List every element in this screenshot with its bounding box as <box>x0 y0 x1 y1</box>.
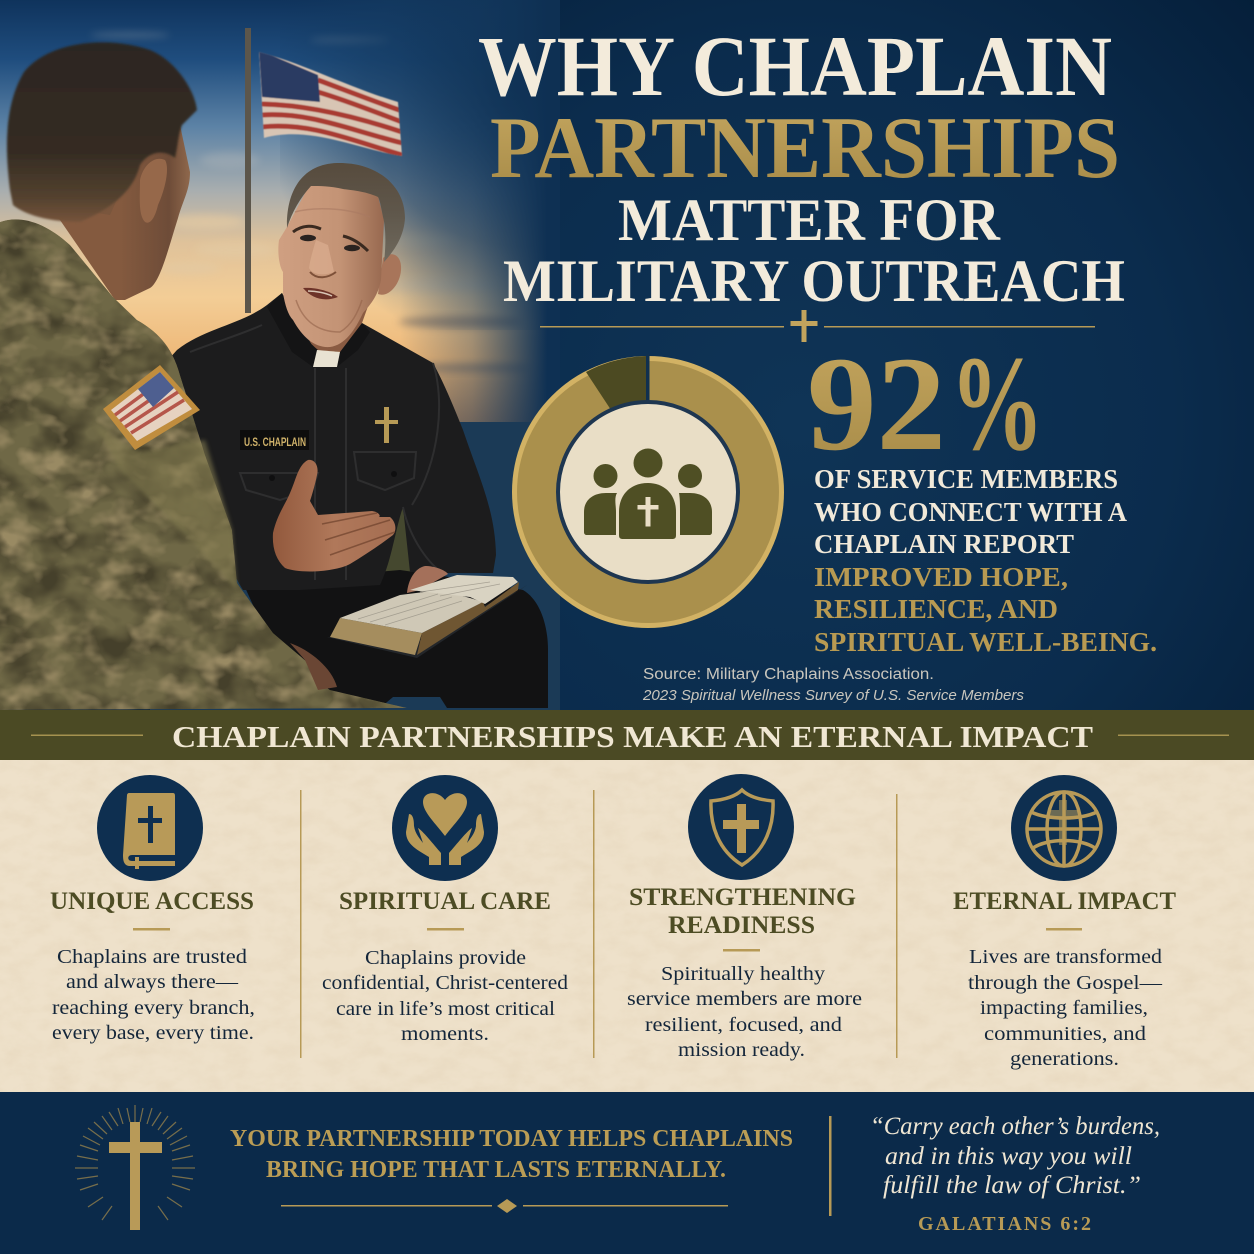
chaplain shirt <box>150 293 496 590</box>
shoulder flag patch <box>103 365 200 450</box>
call to action: YOUR PARTNERSHIP TODAY HELPS CHAPLAINS <box>230 1126 793 1152</box>
hair <box>287 163 405 262</box>
body text: reaching every branch, <box>52 997 255 1019</box>
accent bar <box>723 949 760 952</box>
call to action: BRING HOPE THAT LASTS ETERNALLY. <box>266 1157 726 1183</box>
icon: radiant cross <box>75 1105 195 1230</box>
Bible quote <box>870 1113 1160 1199</box>
statistic description: RESILIENCE, AND <box>814 594 1058 624</box>
body text <box>52 946 255 1044</box>
statistic description: IMPROVED HOPE, <box>814 562 1068 592</box>
body text <box>627 963 862 1061</box>
body text: through the Gospel— <box>968 972 1163 994</box>
body text: and always there— <box>66 971 239 993</box>
heading: UNIQUE ACCESS <box>50 888 254 915</box>
body text: care in life’s most critical <box>336 998 555 1020</box>
title: MATTER FOR <box>618 187 1001 253</box>
title divider with cross <box>540 310 1095 342</box>
body text: Spiritually healthy <box>661 963 825 985</box>
statistic description: SPIRITUAL WELL-BEING. <box>814 627 1157 657</box>
footer vertical divider <box>829 1116 832 1216</box>
heading: ETERNAL IMPACT <box>953 888 1176 915</box>
heading band <box>0 710 1254 760</box>
soldier neck and face <box>60 126 190 300</box>
source note <box>642 666 1024 704</box>
body text: generations. <box>1010 1048 1119 1070</box>
accent bar <box>427 928 464 930</box>
accent bar <box>133 928 170 930</box>
source note: Source: Military Chaplains Association. <box>643 666 934 683</box>
icon: globe with cross <box>1011 775 1117 881</box>
statistic description: OF SERVICE MEMBERS <box>814 464 1118 494</box>
statistic description: CHAPLAIN REPORT <box>814 529 1074 559</box>
statistic description: WHO CONNECT WITH A <box>814 497 1127 527</box>
soldier ear <box>140 159 167 223</box>
big statistic: 92%: % <box>950 329 1044 479</box>
heading: STRENGTHENING <box>629 884 856 911</box>
body text: Chaplains provide <box>365 947 526 969</box>
neck <box>283 295 372 352</box>
name tape: U.S. CHAPLAIN <box>244 435 306 449</box>
source note: 2023 Spiritual Wellness Survey of U.S. Service Members <box>642 687 1024 704</box>
collar band <box>280 293 362 366</box>
title: WHY CHAPLAIN <box>478 18 1112 114</box>
clerical collar tab <box>313 350 340 367</box>
background: navy hero panel <box>0 0 1254 710</box>
panel: eternal impact <box>953 775 1176 1070</box>
heading: SPIRITUAL CARE <box>339 888 551 915</box>
body text: service members are more <box>627 988 862 1010</box>
body text: Lives are transformed <box>969 946 1162 968</box>
photo sky <box>0 0 560 425</box>
body text: communities, and <box>984 1023 1146 1045</box>
title <box>478 18 1125 314</box>
panel: strengthening readiness <box>627 774 862 1061</box>
eyes, brows, mouth <box>293 226 368 299</box>
donut chart: 92 percent <box>512 354 784 628</box>
chest cross pin <box>375 407 398 443</box>
accent bar <box>1046 928 1082 930</box>
body text: moments. <box>401 1023 489 1045</box>
footer band <box>0 1092 1254 1254</box>
face <box>278 180 384 347</box>
statistic description <box>814 464 1157 657</box>
open Bible <box>327 575 527 658</box>
body text: Chaplains are trusted <box>57 946 247 968</box>
quote citation: GALATIANS 6:2 <box>918 1213 1091 1235</box>
Bible quote: “Carry each other’s burdens, <box>870 1113 1160 1140</box>
heading <box>629 884 856 939</box>
column dividers <box>300 790 898 1058</box>
American flag <box>258 52 403 156</box>
chaplain <box>150 163 548 708</box>
body text <box>322 947 568 1045</box>
Bible quote: and in this way you will <box>885 1143 1132 1170</box>
icon: shield with cross <box>688 774 794 880</box>
body text: every base, every time. <box>52 1022 254 1044</box>
chaplain lower hand <box>407 566 448 593</box>
soldier hair <box>7 42 197 222</box>
divider with diamond <box>281 1199 728 1213</box>
icon: hands holding heart <box>392 775 498 881</box>
title: MILITARY OUTREACH <box>503 248 1125 314</box>
soldier <box>0 42 407 710</box>
flag pole <box>245 28 251 313</box>
chaplain trousers <box>243 570 548 708</box>
panel: unique access <box>50 775 255 1044</box>
body text: confidential, Christ-centered <box>322 972 568 994</box>
chaplain gesturing hand <box>273 460 395 571</box>
heading band: CHAPLAIN PARTNERSHIPS MAKE AN ETERNAL IMPACT <box>172 719 1093 754</box>
body text: mission ready. <box>678 1039 805 1061</box>
soldier uniform camo <box>0 219 407 710</box>
big statistic: 92% <box>807 329 1044 479</box>
name tape <box>240 430 309 450</box>
icon: Bible with cross <box>97 775 203 881</box>
body text: impacting families, <box>980 997 1148 1019</box>
photo ground <box>150 422 560 710</box>
body text <box>968 946 1163 1070</box>
Bible quote: fulfill the law of Christ.” <box>883 1172 1141 1199</box>
panel: spiritual care <box>322 775 568 1045</box>
photo: chaplain talking with soldier at sunset <box>0 0 560 710</box>
body text: resilient, focused, and <box>645 1014 842 1036</box>
big statistic: 92%: 92 <box>807 330 946 479</box>
icon: group of people with cross <box>584 448 712 539</box>
parchment panel <box>0 760 1254 1092</box>
soldier shoulder panel <box>95 425 237 590</box>
heading: READINESS <box>668 912 815 939</box>
call to action <box>230 1126 793 1183</box>
title: PARTNERSHIPS <box>490 100 1120 197</box>
soldier hand <box>290 643 337 690</box>
ear <box>378 254 401 295</box>
donut remaining wedge <box>586 356 646 410</box>
